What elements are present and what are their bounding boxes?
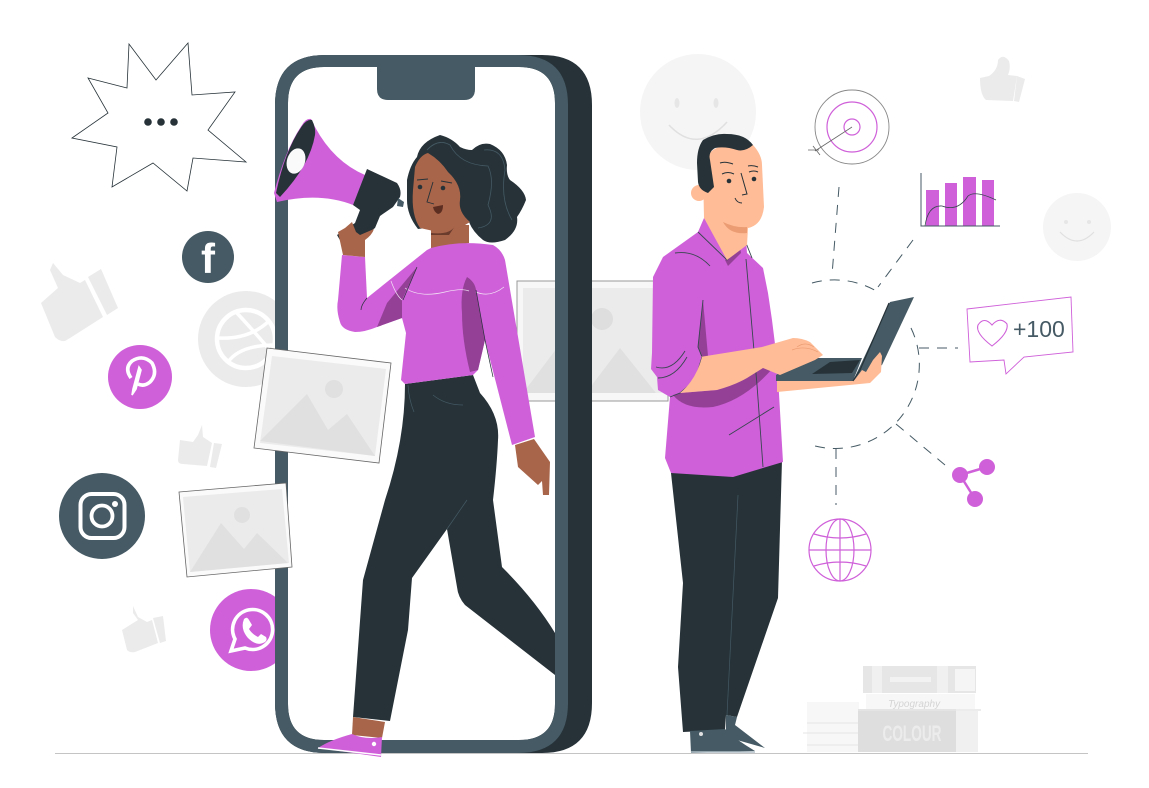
icon: whatsapp	[210, 589, 275, 671]
stack of books	[803, 666, 981, 752]
woman: sweater	[337, 243, 535, 445]
man: neck and face	[703, 145, 764, 260]
icon: thumbs up top right	[980, 57, 1025, 102]
woman: face	[413, 153, 470, 232]
woman with megaphone	[274, 119, 555, 757]
icon: small thumbs up lower left	[122, 606, 166, 652]
woman: trouser details	[408, 385, 467, 529]
bar chart	[921, 173, 1000, 226]
woman: sweater seams	[391, 281, 504, 300]
man: back shoe	[726, 715, 765, 748]
icon: facebook: f	[201, 235, 216, 282]
icon: share	[952, 459, 995, 507]
man: ear	[691, 185, 707, 201]
icon: instagram	[59, 473, 145, 559]
woman: neck	[431, 225, 469, 250]
phone body	[275, 55, 592, 753]
dashed circle network	[812, 187, 958, 505]
icon: large thumbs up left	[41, 263, 118, 341]
man: front shoe	[690, 729, 755, 753]
man: shirt	[651, 218, 783, 477]
icon: small thumbs up left	[178, 425, 222, 468]
ground line	[55, 752, 1088, 754]
laptop: base	[776, 358, 862, 381]
woman: trousers	[353, 375, 555, 721]
speech burst with ellipsis	[72, 43, 246, 191]
book: typography	[866, 694, 975, 710]
man: chin shadow	[723, 222, 747, 233]
spoke lines	[832, 187, 958, 505]
woman: lower hand	[515, 439, 550, 495]
man: trouser crease	[727, 495, 738, 715]
icon: pinterest	[108, 345, 172, 409]
man: collar and placket lines	[656, 232, 774, 467]
picture frame: behind phone	[517, 281, 668, 401]
megaphone: inner speaker	[283, 146, 309, 176]
laptop: screen	[853, 297, 914, 381]
book: colour	[858, 709, 981, 752]
laptop	[776, 297, 914, 383]
smiley: large	[640, 54, 756, 170]
megaphone	[274, 119, 404, 249]
icon: target with arrow	[808, 90, 889, 164]
picture frame: lower left	[179, 483, 292, 577]
megaphone: tip	[397, 198, 404, 207]
megaphone: cone	[274, 119, 365, 205]
woman: shoe	[318, 734, 382, 757]
woman: ankle	[352, 717, 385, 738]
picture frame: upper left	[254, 348, 391, 463]
man: shirt shadow	[673, 247, 773, 408]
megaphone: mouth	[276, 120, 315, 197]
book: colour: COLOUR	[882, 721, 942, 746]
icon: dribbble	[198, 291, 275, 387]
woman: hair strands	[427, 142, 512, 228]
smiley: small	[1043, 193, 1111, 261]
woman: facial features	[417, 179, 455, 235]
woman: sleeve line	[361, 267, 493, 377]
book: typography: Typography	[888, 699, 941, 710]
woman: sweater shadows	[377, 267, 485, 372]
man with laptop	[651, 134, 914, 753]
book: top	[863, 666, 976, 693]
laptop: trackpad	[812, 360, 860, 374]
woman: hair	[407, 135, 526, 242]
man: trousers	[671, 460, 782, 732]
man: upper arm and hand	[680, 338, 823, 393]
woman: raised hand	[338, 222, 374, 257]
man: facial features	[720, 162, 758, 203]
like count: +100	[1013, 316, 1065, 342]
laptop: fingers holding	[853, 352, 882, 383]
like bubble +100	[967, 297, 1073, 374]
book: blank left	[803, 702, 859, 752]
icon: globe	[809, 519, 871, 581]
man: lower forearm	[777, 381, 870, 392]
man: hair	[697, 134, 753, 193]
icon: facebook	[182, 231, 234, 283]
megaphone: back and grip	[337, 169, 401, 249]
